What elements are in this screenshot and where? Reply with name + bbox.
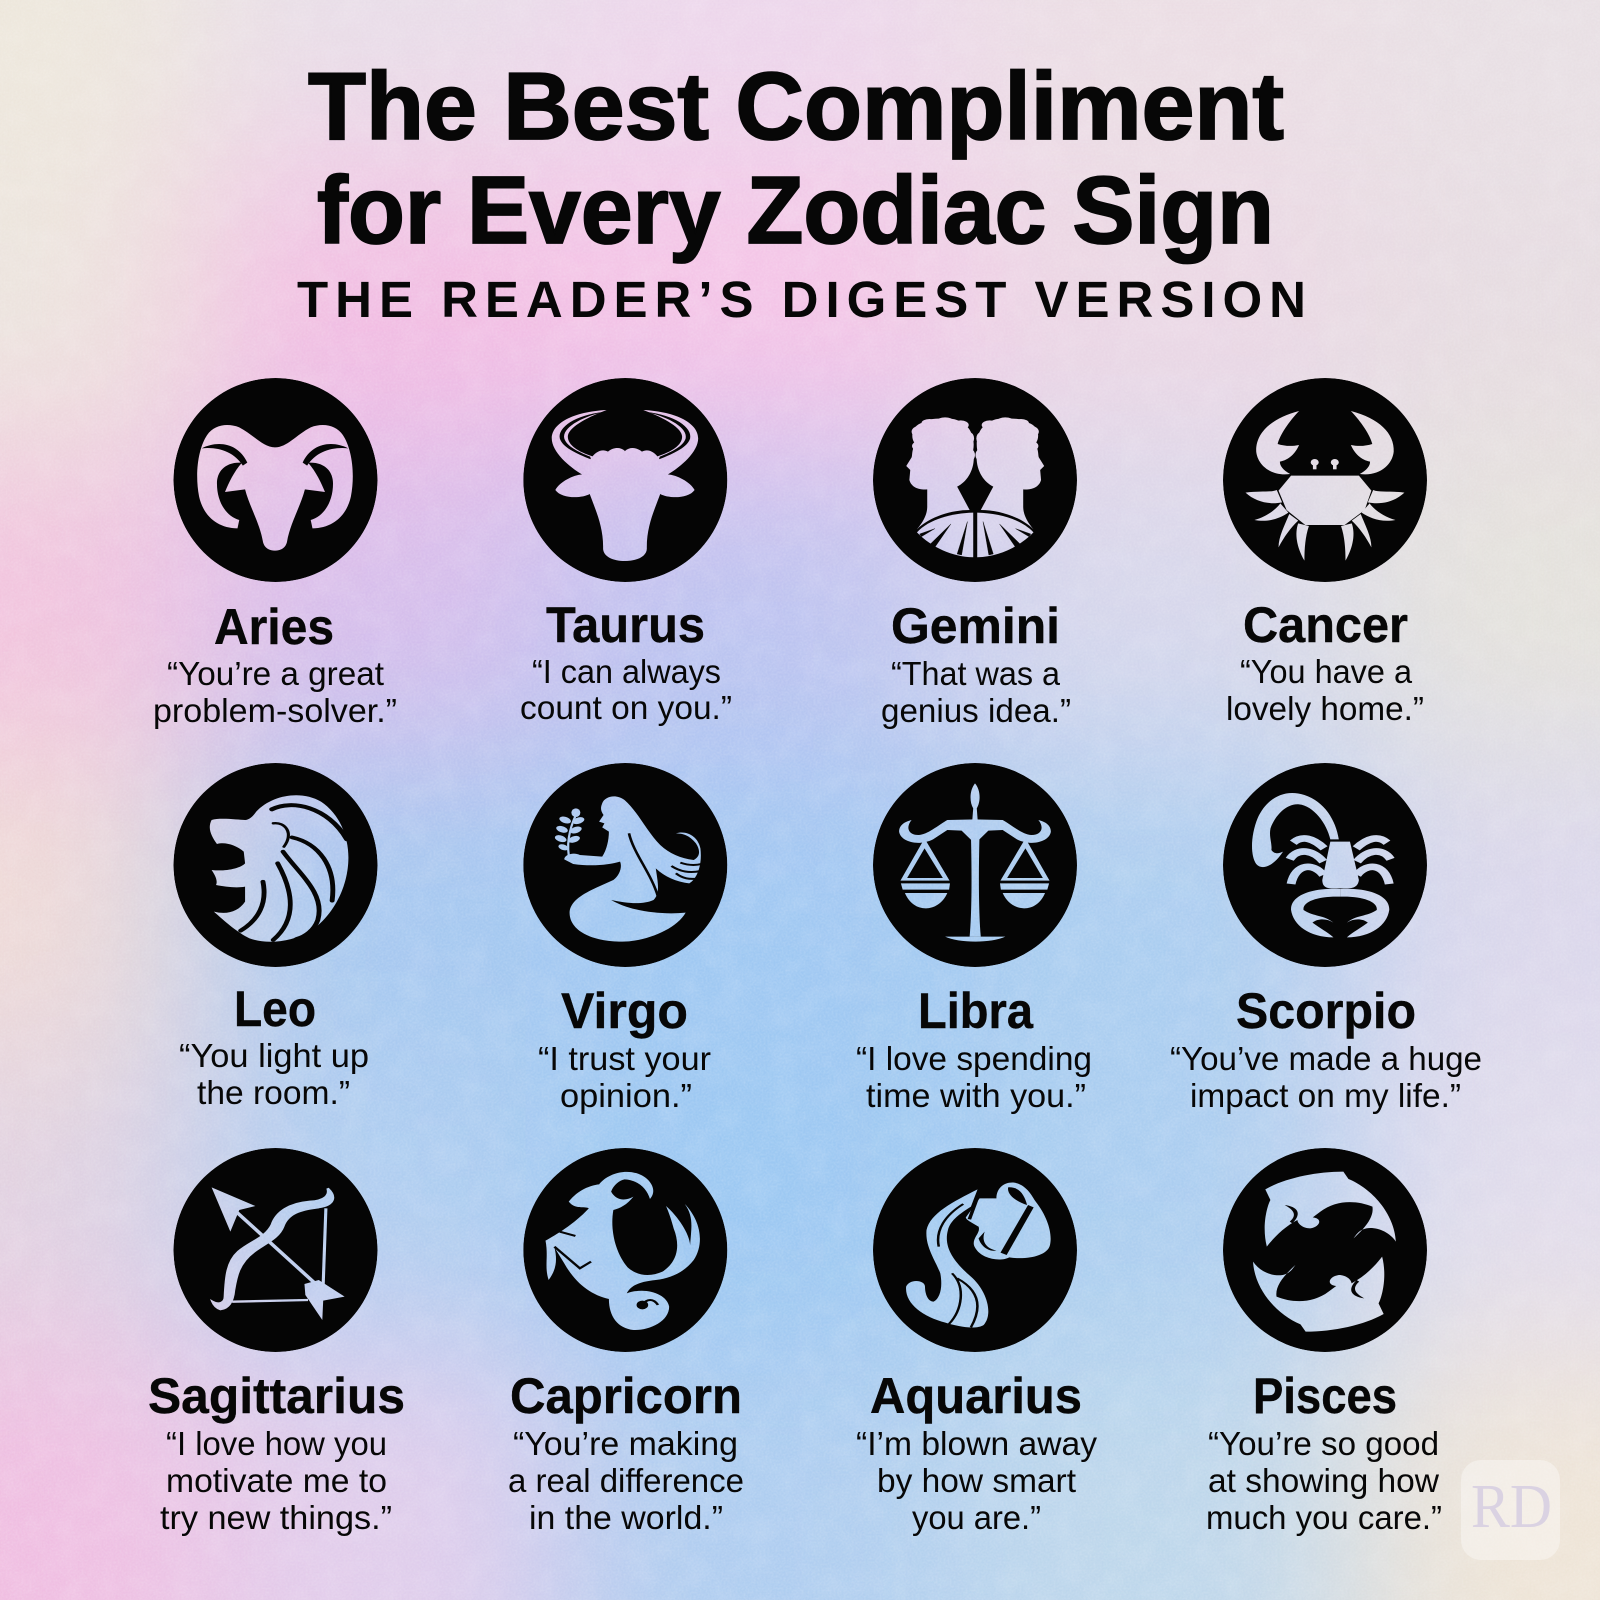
quote	[856, 1425, 1098, 1536]
panel: libra	[856, 763, 1092, 1114]
quote: try new things.”	[160, 1499, 392, 1536]
quote: “That was a	[891, 655, 1061, 692]
panel: aquarius	[856, 1148, 1098, 1536]
name: Virgo	[561, 983, 688, 1039]
quote: “You’re a great	[167, 655, 384, 692]
quote: “I trust your	[538, 1040, 711, 1077]
quote	[153, 655, 397, 729]
icon: virgo maiden	[523, 763, 727, 967]
quote: in the world.”	[529, 1499, 723, 1536]
quote: “I love spending	[856, 1040, 1092, 1077]
panel: virgo	[523, 763, 727, 1114]
logo: RD badge	[1461, 1460, 1560, 1560]
quote: “I can always	[532, 653, 721, 690]
panel: scorpio	[1170, 763, 1482, 1114]
name: Cancer	[1243, 597, 1408, 653]
quote: genius idea.”	[881, 692, 1071, 729]
icon: aquarius water bearer jug	[873, 1148, 1077, 1352]
title: The Best Compliment	[308, 53, 1284, 160]
icon: sagittarius bow and arrow	[174, 1148, 378, 1352]
quote	[520, 653, 732, 726]
icon: pisces fish	[1223, 1148, 1427, 1352]
icon: taurus bull	[523, 378, 727, 582]
quote: impact on my life.”	[1190, 1077, 1461, 1114]
panel: taurus	[520, 378, 732, 726]
quote	[508, 1425, 744, 1536]
panel: sagittarius	[148, 1148, 405, 1536]
quote: count on you.”	[520, 689, 732, 726]
quote	[1206, 1425, 1442, 1536]
panel: leo	[174, 763, 378, 1111]
panel: aries	[153, 378, 397, 729]
title	[308, 53, 1284, 264]
icon: leo lion	[174, 763, 378, 967]
icon: capricorn sea goat	[523, 1148, 727, 1352]
quote: by how smart	[877, 1462, 1076, 1499]
quote: problem-solver.”	[153, 692, 397, 729]
name: Taurus	[546, 597, 705, 653]
quote	[881, 655, 1071, 729]
quote: “You light up	[179, 1037, 369, 1074]
quote	[1170, 1040, 1482, 1114]
subtitle: THE READER’S DIGEST VERSION	[297, 271, 1306, 328]
name: Aries	[214, 599, 334, 655]
icon: gemini twins	[873, 378, 1077, 582]
icon: aries ram	[174, 378, 378, 582]
name: Pisces	[1253, 1368, 1397, 1424]
quote: the room.”	[197, 1074, 350, 1111]
icon: scorpio scorpion	[1223, 763, 1427, 967]
quote	[179, 1037, 369, 1111]
quote: “You’ve made a huge	[1170, 1040, 1482, 1077]
quote: “You’re making	[513, 1425, 738, 1462]
quote: opinion.”	[560, 1077, 692, 1114]
quote: “I love how you	[166, 1425, 387, 1462]
quote: motivate me to	[166, 1462, 387, 1499]
title: for Every Zodiac Sign	[317, 157, 1274, 264]
quote: at showing how	[1208, 1462, 1439, 1499]
logo: RD badge: RD	[1471, 1473, 1552, 1541]
name: Capricorn	[510, 1368, 742, 1424]
quote: time with you.”	[866, 1077, 1086, 1114]
name: Libra	[918, 983, 1034, 1039]
name: Leo	[234, 981, 316, 1037]
quote	[1226, 653, 1424, 727]
quote	[538, 1040, 711, 1114]
icon: cancer crab	[1223, 378, 1427, 582]
quote: you are.”	[912, 1499, 1041, 1536]
quote: a real difference	[508, 1462, 744, 1499]
quote	[856, 1040, 1092, 1114]
panel: pisces	[1206, 1148, 1442, 1536]
quote: “You have a	[1240, 653, 1413, 690]
name: Gemini	[891, 598, 1060, 654]
name: Aquarius	[870, 1368, 1082, 1424]
panel: cancer	[1223, 378, 1427, 727]
quote: much you care.”	[1206, 1499, 1442, 1536]
quote: “I’m blown away	[856, 1425, 1098, 1462]
name: Sagittarius	[148, 1368, 405, 1424]
icon: libra scales	[873, 763, 1077, 967]
quote: “You’re so good	[1208, 1425, 1439, 1462]
name: Scorpio	[1236, 983, 1416, 1039]
quote: lovely home.”	[1226, 690, 1424, 727]
panel: capricorn	[508, 1148, 744, 1536]
panel: gemini	[873, 378, 1077, 729]
quote	[160, 1425, 392, 1536]
